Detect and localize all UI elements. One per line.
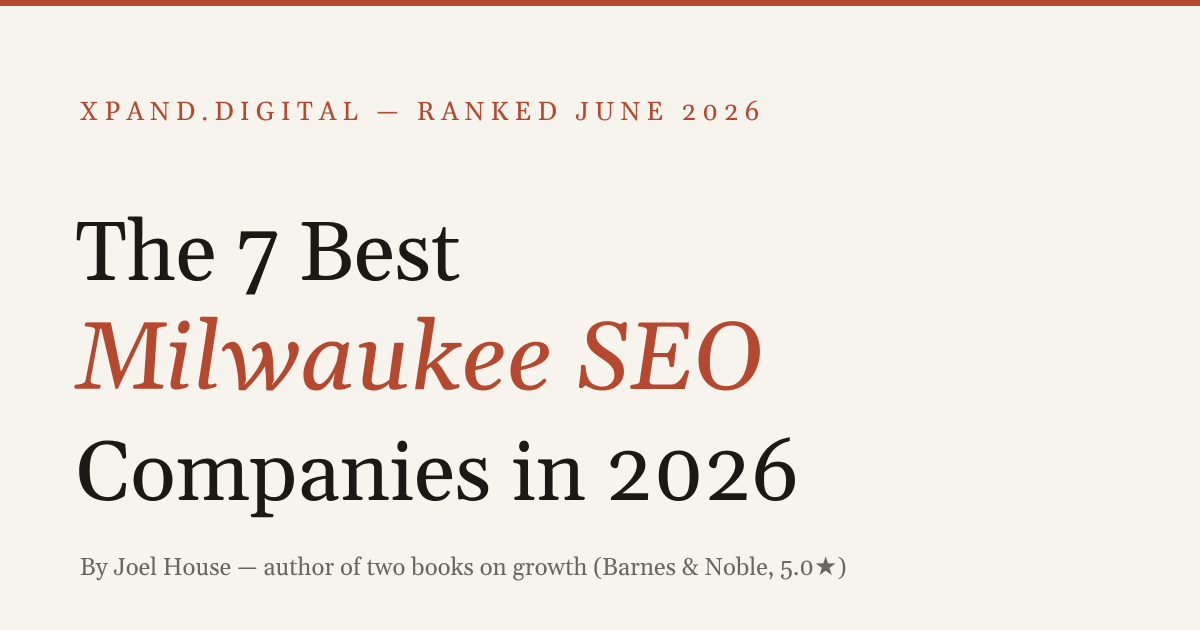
title line 3: Companies in 2026: [76, 422, 799, 529]
eyebrow: publisher and ranking date: XPAND.DIGITAL — RANKED JUNE 2026: [80, 96, 765, 129]
byline: By Joel House — author of two books on growth (Barnes & Noble, 5.0★): [80, 552, 846, 584]
top accent bar: [0, 0, 1200, 6]
title line 2: highlighted: Milwaukee SEO: [76, 300, 763, 422]
title line 1: The 7 Best: [75, 202, 460, 309]
